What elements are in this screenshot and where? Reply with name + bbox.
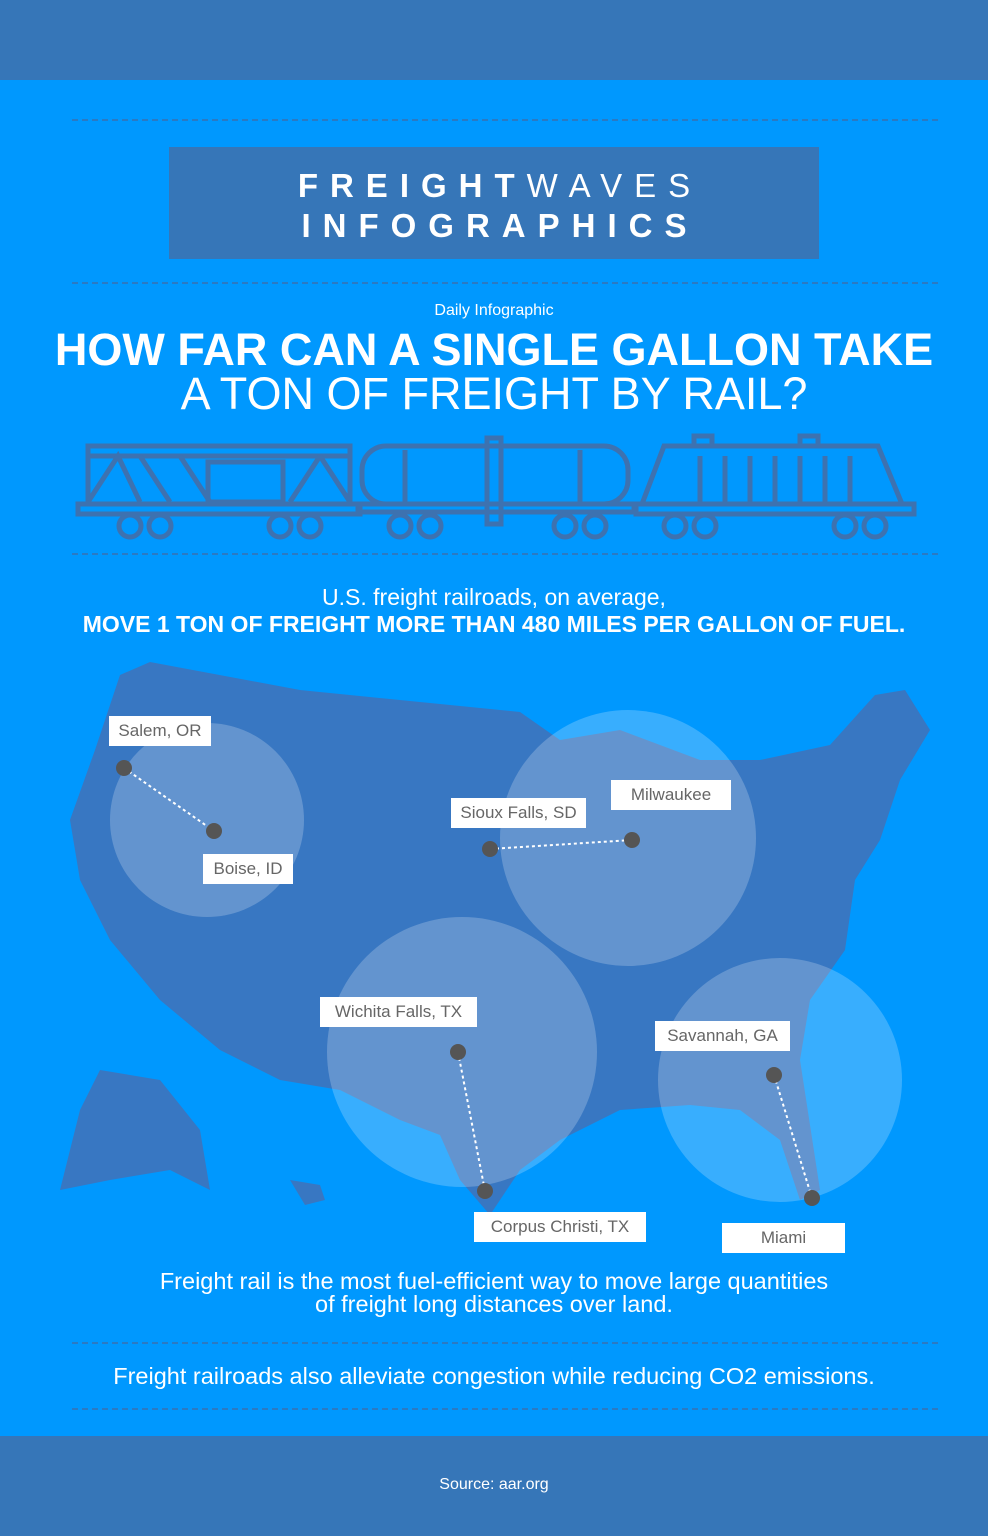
train illustration: [76, 434, 916, 540]
text: Sioux Falls, SD: [460, 803, 577, 822]
circles: [110, 710, 902, 1202]
labels: Salem, OR: [118, 721, 202, 740]
city dots: [116, 760, 820, 1206]
key statement: U.S. freight railroads, on average,: [322, 584, 666, 610]
text: Corpus Christi, TX: [491, 1217, 629, 1236]
labels: [109, 716, 211, 746]
title: A TON OF FREIGHT BY RAIL?: [181, 368, 807, 419]
text: Miami: [761, 1228, 806, 1247]
logo box: [169, 147, 819, 259]
top bar: [0, 0, 988, 80]
text: Boise, ID: [214, 859, 282, 878]
text: fuel efficient: of freight long distances over land.: [315, 1291, 673, 1317]
map: [60, 662, 930, 1212]
text: fuel efficient: [160, 1268, 828, 1317]
footer: [0, 1436, 988, 1536]
routes: [124, 768, 812, 1198]
text: Milwaukee: [631, 785, 711, 804]
title: HOW FAR CAN A SINGLE GALLON TAKE: [55, 324, 933, 375]
text: Wichita Falls, TX: [335, 1002, 462, 1021]
key statement: [83, 584, 905, 637]
logo box: FREIGHTWAVES: [298, 167, 702, 204]
title: [55, 324, 933, 419]
key statement: MOVE 1 TON OF FREIGHT MORE THAN 480 MILES PER GALLON OF FUEL.: [83, 611, 905, 637]
text: congestion: Freight railroads also alleviate congestion while reducing CO2 emissions.: [113, 1363, 875, 1389]
text: fuel efficient: Freight rail is the most fuel-efficient way to move large quantities: [160, 1268, 828, 1294]
logo box: INFOGRAPHICS: [301, 207, 698, 244]
map: US outline: [60, 662, 930, 1215]
text: Savannah, GA: [667, 1026, 778, 1045]
subtitle: Daily Infographic: [434, 302, 554, 319]
footer: Source: aar.org: [439, 1476, 549, 1493]
